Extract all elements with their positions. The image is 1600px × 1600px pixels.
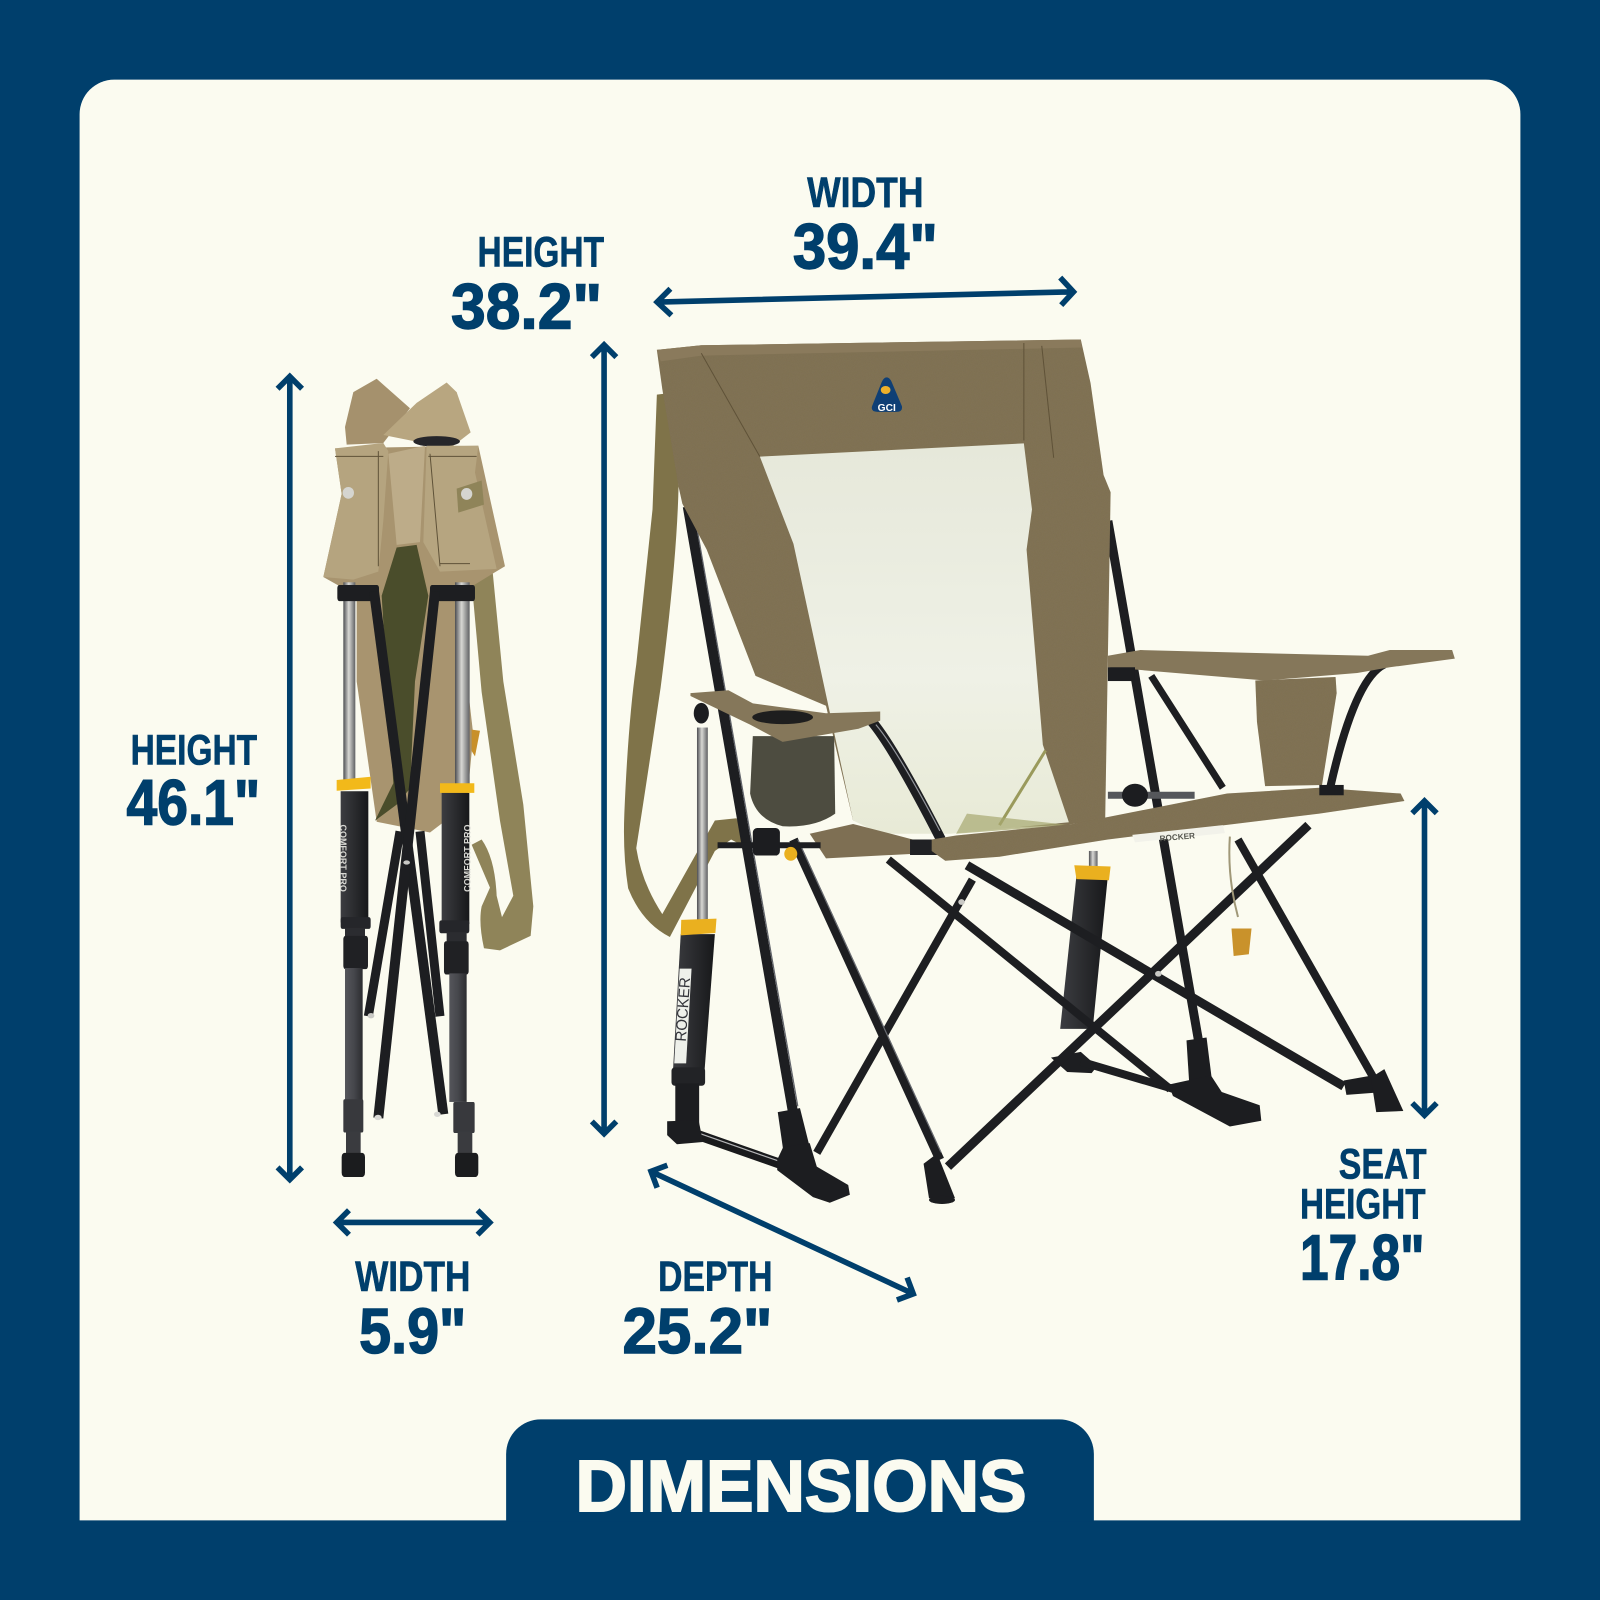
right armrest support bbox=[1330, 664, 1384, 788]
left armrest support bbox=[872, 722, 941, 839]
cup holder bbox=[752, 710, 813, 724]
rear X tubes bbox=[888, 860, 1170, 1089]
rear base bbox=[1051, 1052, 1097, 1073]
front leg and X bbox=[793, 839, 940, 1160]
label: HEIGHT bbox=[131, 726, 257, 773]
value: 17.8" bbox=[1300, 1222, 1424, 1294]
panel: rocker chair photo bbox=[624, 340, 1455, 1204]
strap bbox=[457, 481, 533, 950]
arrow bbox=[592, 345, 616, 1134]
value: 46.1" bbox=[127, 766, 260, 838]
yellow collars bbox=[337, 777, 371, 791]
cylinders and legs bbox=[341, 791, 368, 922]
arrow bbox=[337, 1210, 490, 1235]
small bolts bbox=[343, 487, 354, 499]
right armrest bbox=[1108, 650, 1455, 680]
front rocker cylinder bbox=[673, 934, 715, 1078]
chrome rods bbox=[343, 582, 355, 781]
left armrest bbox=[690, 690, 880, 742]
mesh green strut seen through bbox=[999, 751, 1046, 825]
dimension: seat height bbox=[1300, 801, 1437, 1294]
label: WIDTH bbox=[355, 1253, 470, 1300]
logo text: GCI bbox=[878, 403, 896, 414]
label line two: HEIGHT bbox=[1300, 1180, 1426, 1227]
label: WIDTH bbox=[807, 169, 923, 216]
dimension: folded height bbox=[127, 377, 302, 1180]
logo badge bbox=[872, 377, 902, 412]
fabric underlay bbox=[323, 446, 505, 596]
value: 25.2" bbox=[622, 1295, 772, 1367]
mesh cup pouch bbox=[750, 736, 835, 826]
dimension: chair width bbox=[657, 169, 1073, 315]
left seat sleeve bbox=[810, 824, 913, 858]
folded chair brand text right: COMFORT PRO bbox=[462, 824, 472, 892]
back fabric folds bbox=[345, 379, 410, 445]
value: 5.9" bbox=[359, 1295, 466, 1367]
mesh centre bbox=[375, 545, 428, 821]
rocker leg text: ROCKER bbox=[673, 977, 694, 1042]
inner folded tubes bbox=[368, 831, 440, 1016]
seat label bbox=[1132, 825, 1225, 842]
pivot bolt bbox=[1155, 971, 1162, 977]
right arm pouch bbox=[1255, 677, 1337, 786]
pull cord bbox=[1229, 837, 1238, 917]
label: HEIGHT bbox=[478, 228, 604, 275]
rod and latch bbox=[718, 842, 821, 848]
hanging fabric bbox=[357, 590, 473, 832]
connector hardware bbox=[1122, 784, 1148, 807]
value: 38.2" bbox=[451, 271, 602, 343]
title tab bbox=[506, 1419, 1094, 1527]
rocker label plate bbox=[674, 969, 692, 1063]
seat label text: ROCKER bbox=[1159, 831, 1195, 843]
title: DIMENSIONS bbox=[576, 1446, 1027, 1527]
fabric blocks bbox=[323, 443, 388, 580]
chrome rod bbox=[697, 728, 708, 923]
rear frame bbox=[1108, 521, 1199, 1043]
crossing tubes bbox=[374, 591, 443, 1114]
arrow bbox=[651, 1165, 913, 1300]
panel: folded chair photo bbox=[323, 379, 533, 1177]
mesh back panel bbox=[760, 443, 1069, 834]
carry strap bbox=[624, 393, 749, 937]
seat fabric bbox=[932, 788, 1404, 861]
back panel fabric bbox=[657, 340, 1111, 828]
rear rocker cylinder bbox=[1089, 851, 1098, 868]
arrow bbox=[657, 278, 1073, 315]
top hardware bbox=[337, 585, 379, 601]
value: 39.4" bbox=[793, 210, 938, 282]
arrow bbox=[1412, 801, 1437, 1115]
front left frame bbox=[688, 507, 793, 1115]
orange tag bbox=[1231, 928, 1252, 956]
strap top loop bbox=[457, 481, 484, 513]
label line one: SEAT bbox=[1339, 1141, 1427, 1188]
dimension: chair height bbox=[451, 228, 616, 1134]
label: DEPTH bbox=[658, 1253, 772, 1300]
dimension: folded width bbox=[337, 1210, 490, 1367]
arrow bbox=[278, 377, 302, 1180]
folded chair brand text left: COMFORT PRO bbox=[338, 824, 348, 892]
front base bbox=[671, 1067, 705, 1086]
dimension: chair depth bbox=[622, 1165, 913, 1367]
